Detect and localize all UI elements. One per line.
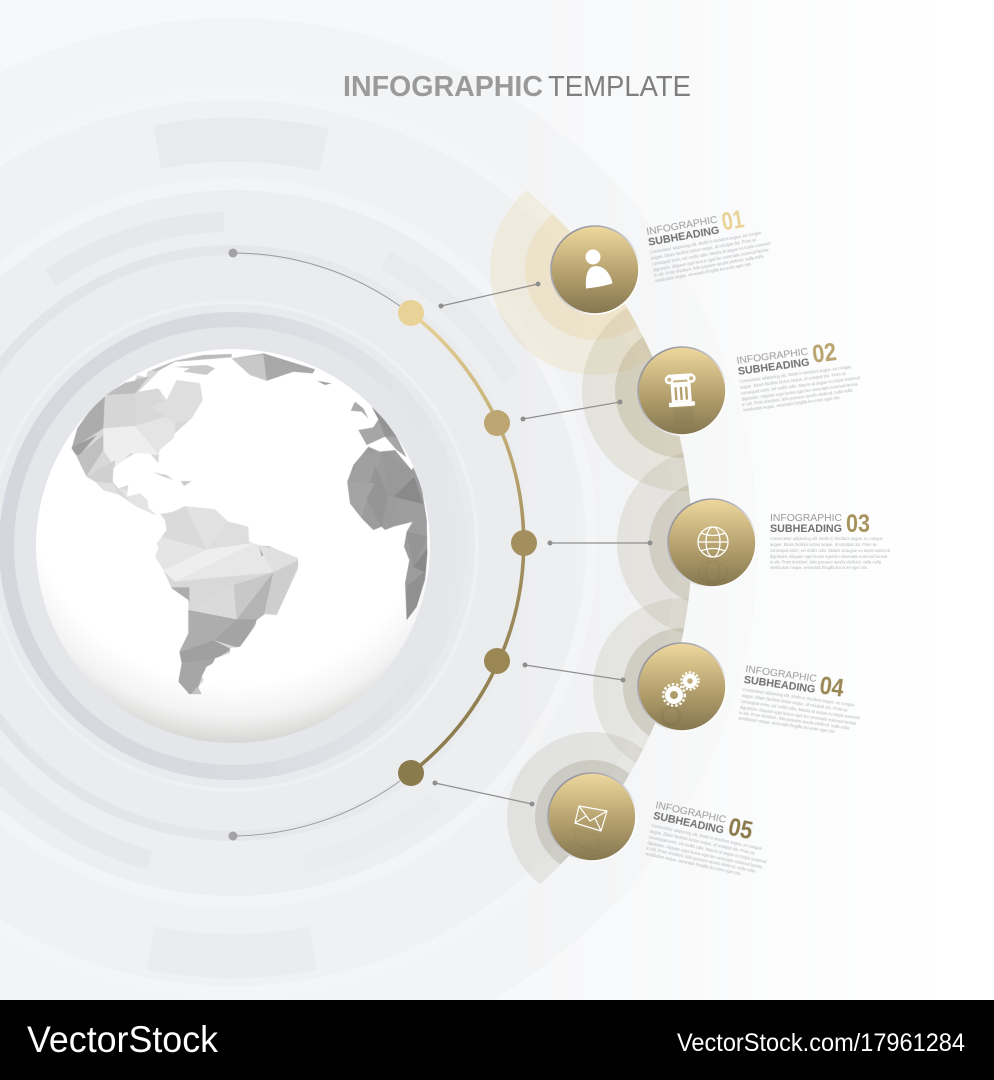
text block 5: SUBHEADING [652, 810, 725, 837]
gold timeline arc [411, 313, 524, 773]
continent: Caribbean islands [153, 472, 192, 486]
text block 2: augue. Etiam facilisis luctus neque, id volutpat dui. Proin ac [740, 371, 847, 390]
text block 5: in elit. Proin tincidunt, felis posuere iaculis eleifend, nulla nulla [646, 846, 756, 874]
background sector: bottom [151, 948, 313, 956]
icon: column [664, 373, 699, 425]
title: INFOGRAPHIC [343, 71, 543, 103]
leader line 2 [520, 400, 622, 422]
text block 3 [770, 510, 891, 570]
text block 2: 02 [811, 338, 838, 369]
text block 1: 01 [720, 205, 746, 237]
text block 5: dignissim. Aliquam eget lectus eget leo venenatis euismod lacinia [647, 840, 763, 870]
continent: South America [155, 506, 298, 694]
fans behind the five nodes [490, 190, 690, 884]
text block 1: consequat enim, vel mollis odio. Mauris at augue eu turpis euismod [652, 241, 771, 267]
thin arc: lower [228, 781, 400, 840]
text block 5: vestibulum neque, venenatis fringilla leo enim eget nisi. [645, 851, 742, 876]
background sector: top [157, 140, 324, 150]
text block 4: augue. Etiam facilisis luctus neque, id volutpat dui. Proin ac [741, 693, 849, 713]
text block 3: in elit. Proin tincidunt, felis posuere iaculis eleifend, nulla nulla [770, 560, 882, 564]
text block 1 [645, 201, 774, 283]
fan 3 [617, 452, 690, 634]
text block 2: SUBHEADING [737, 357, 810, 378]
text block 3: consequat enim, vel mollis odio. Mauris at augue eu turpis euismod [770, 548, 891, 553]
text block 4: Consectetur adipiscing elit. Morbi in tincidunt augue, eu congue [742, 687, 855, 708]
timeline dots [398, 300, 537, 786]
leader line 5 [432, 780, 534, 806]
text block 1: dignissim. Aliquam eget lectus eget leo venenatis euismod lacinia [653, 247, 769, 272]
continent: Europe [351, 402, 407, 457]
leader lines [432, 282, 652, 806]
text block 3: vestibulum neque, venenatis fringilla leo enim eget nisi. [770, 565, 868, 570]
leader line 1 [438, 282, 540, 308]
text block 4 [738, 661, 866, 737]
text block 2 [735, 335, 863, 413]
text block 1: augue. Etiam facilisis luctus neque, id volutpat dui. Proin ac [651, 237, 758, 261]
node 3: globe [668, 499, 756, 587]
fan 1 [490, 190, 652, 375]
text block 3: dignissim. Aliquam eget lectus eget leo venenatis euismod lacinia [770, 554, 888, 559]
leader line 4 [522, 662, 626, 682]
text block 2: INFOGRAPHIC [736, 347, 809, 367]
footer image id: VectorStock.com/17961284 [677, 1029, 965, 1057]
text block 5 [645, 797, 775, 881]
thin arc: upper [228, 248, 400, 306]
text block 4: in elit. Proin tincidunt, felis posuere iaculis eleifend, nulla nulla [739, 710, 850, 731]
fan 2 [582, 308, 689, 491]
node 4: gears [638, 643, 726, 731]
leader line 3 [548, 540, 652, 546]
text block 5: augue. Etiam facilisis luctus neque, id volutpat dui. Proin ac [650, 829, 756, 856]
continent: Africa [347, 446, 428, 620]
text block 3: 03 [846, 510, 870, 538]
background sector: upper right [385, 260, 510, 378]
text block 2: consequat enim, vel mollis odio. Mauris at augue eu turpis euismod [741, 375, 861, 396]
text block 3: SUBHEADING [770, 523, 842, 535]
text block 3: augue. Etiam facilisis luctus neque, id volutpat dui. Proin ac [770, 542, 878, 547]
text block 5: consequat enim, vel mollis odio. Mauris at augue eu turpis euismod [648, 834, 767, 864]
text block 5: INFOGRAPHIC [654, 800, 728, 826]
globe [36, 349, 433, 743]
text block 2: in elit. Proin tincidunt, felis posuere iaculis eleifend, nulla nulla [742, 388, 853, 407]
continent: North America [72, 370, 203, 515]
text block 1: Consectetur adipiscing elit. Morbi in tincidunt augue, eu congue [650, 230, 762, 255]
title: TEMPLATE [548, 71, 691, 103]
text block 3: INFOGRAPHIC [770, 513, 842, 524]
text block 5: Consectetur adipiscing elit. Morbi in tincidunt augue, eu congue [651, 823, 763, 851]
text block 5: 05 [726, 813, 755, 845]
text block 4: INFOGRAPHIC [745, 664, 818, 685]
icon: person [586, 250, 612, 288]
background sector: upper left [50, 222, 224, 278]
node 1: person [551, 226, 639, 314]
fan 4 [593, 598, 688, 763]
text block 1: SUBHEADING [647, 224, 720, 249]
text block 4: dignissim. Aliquam eget lectus eget leo venenatis euismod lacinia [740, 705, 857, 726]
icon: wire globe [698, 527, 728, 583]
node 5: envelope [548, 773, 636, 861]
footer logo text: VectorStock [27, 1019, 218, 1060]
text block 4: SUBHEADING [743, 674, 816, 696]
icon: envelope [574, 806, 607, 852]
background sector: lower left [0, 760, 150, 860]
text block 1: in elit. Proin tincidunt, felis posuere iaculis eleifend, nulla nulla [654, 254, 764, 278]
continent: Greenland and Arctic [150, 353, 332, 385]
title [343, 71, 691, 103]
fan 5 [507, 732, 643, 884]
node 2: column [638, 347, 726, 435]
text block 2: vestibulum neque, venenatis fringilla leo enim eget nisi. [743, 395, 841, 413]
text block 1: INFOGRAPHIC [646, 215, 719, 238]
text block 2: Consectetur adipiscing elit. Morbi in tincidunt augue, eu congue [739, 364, 852, 384]
text block 4: 04 [818, 672, 846, 703]
text block 4: vestibulum neque, venenatis fringilla leo enim eget nisi. [738, 716, 836, 734]
icon: gears [662, 672, 699, 725]
text block 3: Consectetur adipiscing elit. Morbi in tincidunt augue, eu congue [770, 536, 884, 541]
background sector: lower right [304, 801, 436, 863]
footer bar [0, 1000, 994, 1080]
text block 1: vestibulum neque, venenatis fringilla leo enim eget nisi. [655, 261, 752, 283]
text block 4: consequat enim, vel mollis odio. Mauris at augue eu turpis euismod [741, 699, 861, 720]
text block 2: dignissim. Aliquam eget lectus eget leo venenatis euismod lacinia [741, 381, 859, 402]
